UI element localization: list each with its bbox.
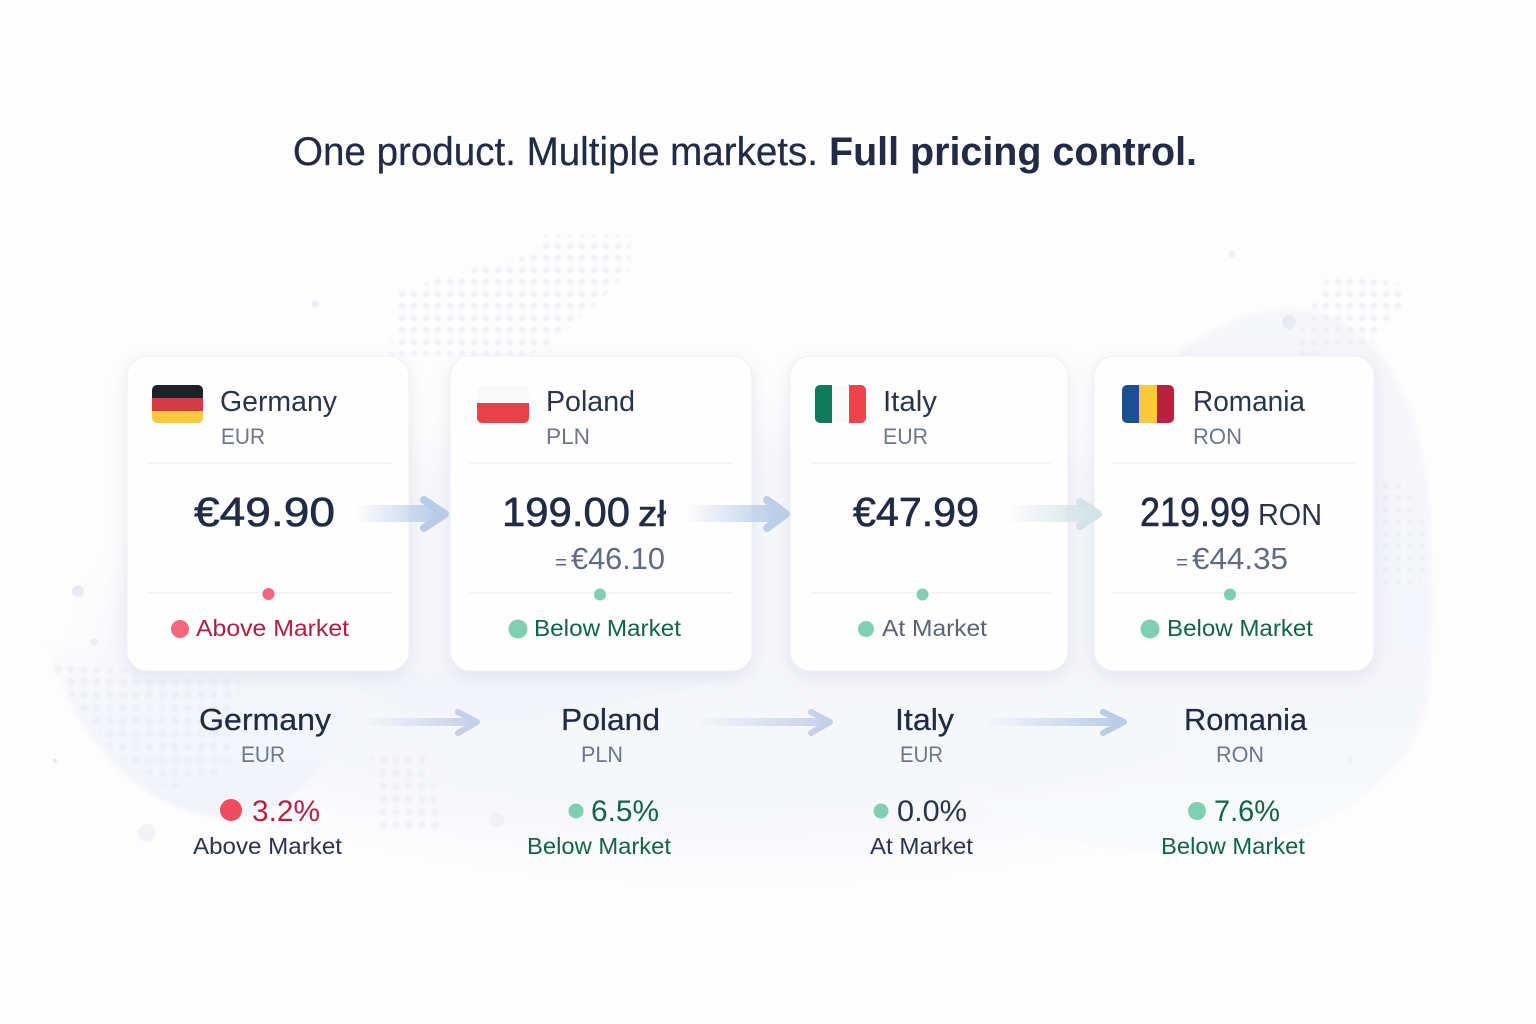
card: Poland: 199.00 xyxy=(502,489,630,535)
card: Italy: €47.99 xyxy=(853,489,979,535)
card: Germany: EUR xyxy=(221,424,265,449)
summary: Romania: RON xyxy=(1216,742,1264,767)
summary: Italy: At Market xyxy=(870,833,974,859)
arrow: Germany to Poland summary xyxy=(362,712,477,733)
summary: Germany: 3.2% xyxy=(252,795,320,828)
card: Poland: Below Market xyxy=(534,615,681,641)
card: Romania: = xyxy=(1176,552,1188,574)
title: Full pricing control. xyxy=(829,130,1197,174)
card: Germany xyxy=(127,356,409,671)
card: Romania: Below Market xyxy=(1167,615,1313,641)
card: Poland: €46.10 xyxy=(571,541,665,576)
title: One product. Multiple markets. xyxy=(293,130,818,174)
card: Italy: Italy xyxy=(883,386,938,418)
card: Romania: €44.35 xyxy=(1192,541,1288,576)
arrow: Germany to Poland price xyxy=(355,500,445,528)
card: Poland: PLN xyxy=(546,424,590,449)
summary: Poland: Below Market xyxy=(527,833,672,859)
summary: Romania: Romania xyxy=(1184,702,1308,737)
summary: Romania xyxy=(1161,702,1308,859)
summary: Germany: Above Market xyxy=(193,833,343,859)
flag: Italy xyxy=(815,385,866,423)
summary: Poland: Poland xyxy=(561,702,660,737)
summary: Romania: 7.6% xyxy=(1214,795,1280,828)
flag: Romania xyxy=(1122,385,1174,423)
arrow: Italy to Romania summary xyxy=(985,712,1124,733)
summary: Romania: Below Market xyxy=(1161,833,1306,859)
arrow: Italy to Romania price xyxy=(1005,502,1098,526)
card: Italy xyxy=(790,356,1068,671)
card: Poland xyxy=(450,356,752,671)
card: Germany: Above Market xyxy=(196,615,349,641)
card: Romania: 219.99 xyxy=(1140,489,1250,535)
summary: Poland: PLN xyxy=(581,742,623,767)
summary: Germany xyxy=(193,702,343,859)
card: Poland: zł xyxy=(638,493,666,534)
summary: Italy xyxy=(870,702,974,859)
flag: Poland xyxy=(477,403,529,423)
card: Romania: Romania xyxy=(1193,386,1306,418)
card: Italy: EUR xyxy=(883,424,928,449)
title xyxy=(293,130,1197,174)
card: Romania: RON xyxy=(1193,424,1242,449)
summary: Italy: 0.0% xyxy=(897,795,967,828)
summary: Poland: 6.5% xyxy=(591,795,659,828)
card: Romania: RON xyxy=(1258,497,1322,532)
card: Germany: €49.90 xyxy=(194,489,335,535)
card: Romania xyxy=(1094,356,1374,671)
summary: Germany: EUR xyxy=(241,742,285,767)
card: Italy: At Market xyxy=(882,615,987,641)
summary: Italy: Italy xyxy=(895,702,955,737)
arrow: Poland to Italy summary xyxy=(695,712,830,733)
summary: Poland xyxy=(527,702,672,859)
summary: Germany: Germany xyxy=(199,702,332,737)
flag: Germany xyxy=(152,385,203,423)
card: Germany: Germany xyxy=(220,386,337,418)
arrow: Poland to Italy price xyxy=(685,500,786,528)
card: Poland: Poland xyxy=(546,386,635,418)
card: Poland: = xyxy=(555,552,567,574)
summary: Italy: EUR xyxy=(900,742,943,767)
